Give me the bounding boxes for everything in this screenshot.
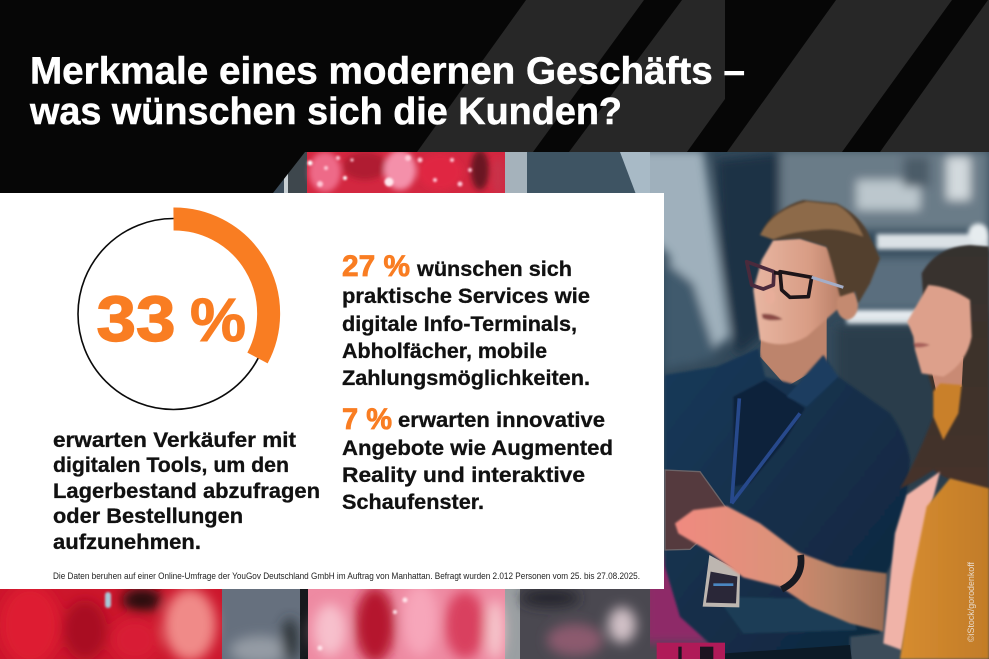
statistic 27 percent: 27 % — [342, 250, 410, 283]
woman: pink top — [883, 472, 940, 650]
man: lanyard — [732, 398, 800, 503]
statistic 27 percent — [342, 250, 590, 390]
man: tablet — [665, 470, 730, 550]
statistic 7 percent: Angebote wie Augmented — [342, 437, 613, 460]
white content panel — [0, 193, 664, 589]
title — [29, 50, 745, 133]
statistic 27 percent: praktische Services wie — [342, 285, 590, 308]
donut chart 33 percent — [78, 218, 269, 410]
title: was wünschen sich die Kunden? — [29, 91, 622, 133]
man: face — [753, 238, 858, 344]
left statement text: aufzunehmen. — [53, 531, 201, 554]
donut value — [96, 283, 246, 355]
statistic 27 percent: wünschen sich — [416, 258, 572, 281]
woman: turtleneck — [933, 383, 962, 440]
man: neck — [760, 317, 827, 387]
woman: hair — [900, 245, 989, 490]
header band with diagonal stripes — [0, 0, 989, 152]
statistic 27 percent: digitale Info-Terminals, — [342, 313, 577, 336]
statistic 7 percent: erwarten innovative — [398, 409, 605, 432]
left statement text: oder Bestellungen — [53, 505, 243, 528]
donut value: 33 — [96, 283, 176, 355]
left statement text — [53, 429, 320, 554]
man: hair — [760, 200, 880, 303]
left statement text: erwarten Verkäufer mit — [53, 429, 296, 452]
background photo — [0, 150, 989, 659]
man: glasses — [747, 262, 843, 297]
photo: cool grey ceiling background — [650, 152, 989, 495]
black corner behind white panel — [0, 152, 305, 193]
statistic 7 percent: Reality und interaktive — [342, 464, 585, 487]
woman: orange jacket — [900, 478, 989, 659]
photo credit: ©iStock/gorodenkoff — [966, 562, 977, 642]
left statement text: digitalen Tools, um den — [53, 454, 289, 477]
man: shirt — [665, 348, 910, 659]
woman: neck — [932, 356, 964, 390]
woman: face — [907, 285, 972, 377]
statistic 7 percent: 7 % — [342, 403, 392, 436]
man: magenta reflection — [643, 553, 710, 643]
man: wristband — [782, 555, 801, 589]
man: badge — [703, 555, 740, 607]
pink lights lower left — [657, 643, 725, 659]
man: forearm and hand — [675, 506, 887, 632]
photo: man, woman and ceiling background — [630, 150, 989, 659]
source note: Die Daten beruhen auf einer Online-Umfrage der YouGov Deutschland GmbH im Auftrag von Manhattan. Befragt wurden 2.012 Personen vom 25. bis 27.08.2025. — [53, 571, 640, 582]
donut value: % — [190, 286, 246, 354]
statistic 27 percent: Zahlungsmöglichkeiten. — [342, 367, 590, 390]
statistic 27 percent: Abholfächer, mobile — [342, 340, 547, 363]
title: Merkmale eines modernen Geschäfts – — [30, 50, 745, 92]
man: trousers and belt — [725, 645, 852, 659]
statistic 7 percent — [342, 403, 613, 514]
photo: grey-blue wall strip top — [505, 152, 650, 193]
statistic 7 percent: Schaufenster. — [342, 491, 484, 514]
photo: red LED wall top — [284, 152, 505, 193]
left statement text: Lagerbestand abzufragen — [53, 480, 320, 503]
photo: red LED wall bottom — [0, 584, 660, 659]
